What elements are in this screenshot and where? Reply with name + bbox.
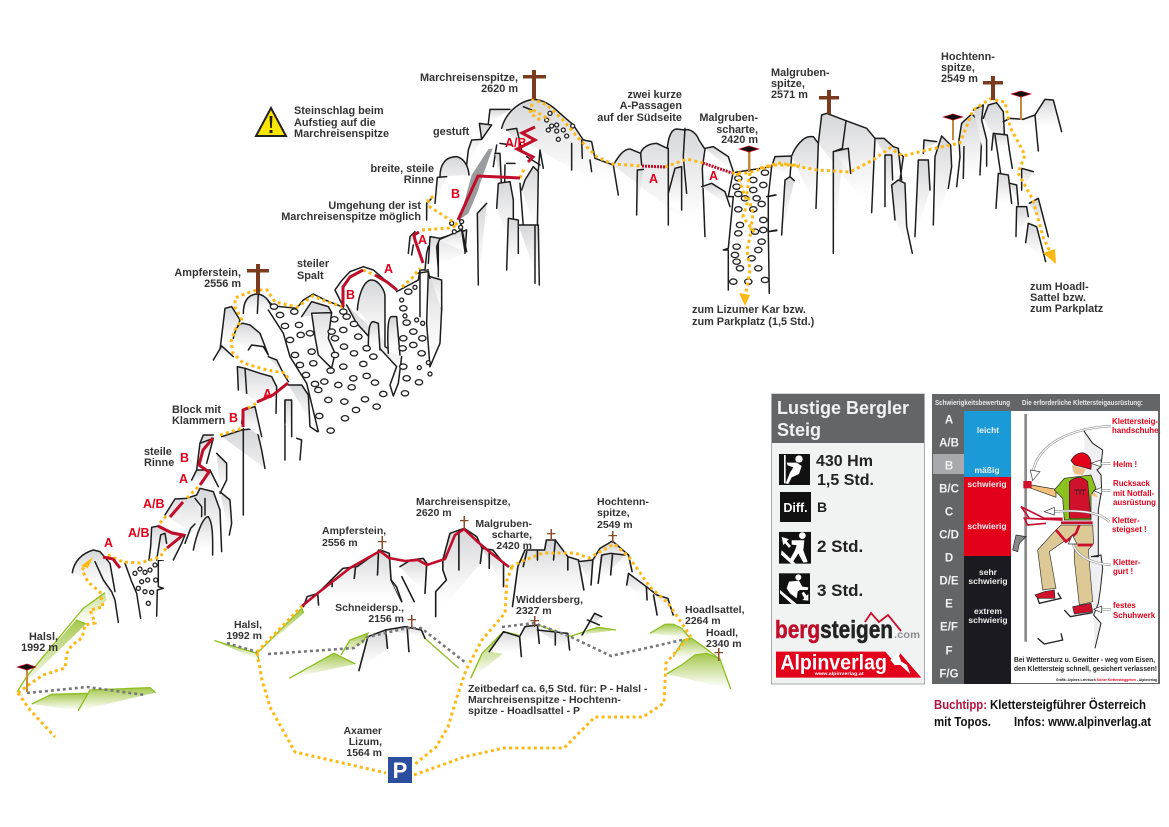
labels: main topo: steile [144, 446, 172, 458]
labels: main topo: breite, steile [370, 163, 434, 175]
icon: ascent [779, 532, 811, 564]
difficulty grades: C [945, 506, 953, 518]
overview map: labels: Zeitbedarf ca. 6,5 Std. für: P - Halsl - [468, 683, 648, 695]
difficulty grades: A/B [939, 438, 959, 450]
difficulty letters on route: A [418, 233, 427, 247]
labels: main topo: zum Hoadl- [1030, 281, 1089, 293]
equipment labels: ausrüstung [1113, 498, 1156, 507]
logo: Alpinverlag: www.alpinverlag.at [813, 671, 864, 676]
overview map: labels: scharte, [492, 529, 532, 541]
difficulty grades: B/C [939, 484, 959, 496]
difficulty letters on route: A [179, 472, 188, 486]
overview map: labels: Halsl, [234, 619, 262, 631]
difficulty letters on route: B [180, 451, 189, 465]
overview map: labels: 2549 m [597, 519, 633, 531]
rocks: Malgrubenspitze and Hochtennspitze section [767, 99, 1062, 262]
labels: main topo: Malgruben- [771, 67, 830, 79]
labels: main topo: 2620 m [481, 83, 518, 95]
overview map: labels: 2264 m [685, 615, 721, 627]
overview map: labels: 2327 m [516, 605, 552, 617]
labels: main topo: Marchreisenspitze möglich [281, 211, 421, 223]
logo: bergsteigen.com: .com [894, 629, 920, 641]
labels: main topo: Marchreisenspitze [294, 128, 389, 140]
labels: main topo [21, 51, 1104, 654]
difficulty names: sehr [979, 567, 998, 577]
book tip: Infos: www.alpinverlag.at [1014, 714, 1152, 729]
overview map: labels: 2420 m [496, 540, 532, 552]
overview map: labels: 2156 m [368, 613, 404, 625]
overview map: labels: spitze, [597, 507, 630, 519]
labels: main topo: zum Parkplatz [1030, 303, 1104, 315]
overview map: routes [227, 529, 691, 775]
equipment labels: Klettersteig- [1112, 417, 1158, 426]
labels: main topo: Sattel bzw. [1030, 292, 1086, 304]
difficulty letters on route: A/B [505, 136, 527, 150]
equipment labels: Kletter- [1112, 516, 1140, 525]
labels: main topo: Klammern [172, 415, 225, 427]
panel: route summary: 430 Hm [816, 453, 873, 470]
labels: main topo: Rinne [404, 174, 434, 186]
panel: route summary [772, 394, 924, 684]
labels: main topo: zum Lizumer Kar bzw. [692, 304, 806, 316]
difficulty names: schwierig [968, 615, 1008, 625]
logo: Alpinverlag: Alpinverlag [780, 651, 887, 674]
labels: main topo: Rinne [144, 457, 174, 469]
equipment labels: gurt ! [1113, 567, 1133, 576]
difficulty grades: F/G [939, 668, 959, 680]
overview map: labels: 2556 m [322, 537, 358, 549]
equipment labels: mit Notfall- [1113, 489, 1155, 498]
icon: warning triangle [256, 108, 286, 136]
illustration: climber with equipment [1013, 414, 1111, 648]
labels: main topo: Steinschlag beim [294, 105, 384, 117]
difficulty letters on route: A [104, 536, 113, 550]
weather warning [1014, 655, 1157, 682]
labels: main topo: 2556 m [204, 278, 241, 290]
rocks: Ampferstein section [213, 198, 467, 437]
overview map: labels: 1564 m [346, 747, 382, 759]
panel: route summary: Lustige Bergler [777, 398, 909, 418]
difficulty grades: E [945, 598, 953, 610]
difficulty names: schwierig [967, 479, 1007, 489]
scree stones [133, 111, 769, 605]
difficulty names: schwierig [967, 521, 1007, 531]
icon: difficulty [780, 492, 811, 522]
difficulty names [967, 425, 1008, 625]
labels: main topo: Spalt [297, 270, 324, 282]
overview map: rock outlines [304, 528, 673, 671]
overview map: labels: Widdersberg, [516, 594, 583, 606]
difficulty names: extrem [974, 606, 1002, 616]
panel: route summary: 3 Std. [817, 581, 863, 600]
overview map: labels: spitze - Hoadlsattel - P [468, 705, 580, 717]
labels: main topo: 2549 m [941, 73, 978, 85]
labels: main topo: spitze, [771, 78, 805, 90]
panel: route summary: 2 Std. [817, 537, 863, 556]
labels: main topo: Ampferstein, [174, 267, 241, 279]
arrowheads [81, 249, 1056, 568]
main route: red climbing sections [103, 127, 732, 568]
difficulty letters on route: A/B [128, 526, 150, 540]
difficulty names: mäßig [974, 465, 1000, 475]
overview map: labels: Ampferstein, [322, 525, 386, 537]
panel: difficulty scale and equipment: Die erforderliche Klettersteigausrüstung: [1022, 400, 1143, 407]
flags [17, 91, 1031, 692]
overview map: labels: Hoadlsattel, [685, 604, 745, 616]
icon: descent [779, 573, 810, 604]
labels: main topo: gestuft [433, 126, 470, 138]
panel: route summary: B [817, 499, 827, 515]
labels: main topo: Marchreisenspitze, [420, 72, 518, 84]
book tip: mit Topos. [934, 714, 991, 729]
book tip: Klettersteigführer Österreich [990, 697, 1146, 712]
difficulty letters on route: B [346, 288, 355, 302]
equipment labels: Rucksack [1113, 479, 1150, 488]
equipment labels: steigset ! [1112, 525, 1147, 534]
labels: main topo: steiler [297, 258, 330, 270]
panel: difficulty scale and equipment: Schwierigkeitsbewertung [935, 400, 1010, 407]
difficulty grades: B [945, 460, 953, 472]
book tip: Buchtipp: [934, 697, 987, 712]
labels: main topo: 1992 m [21, 642, 58, 654]
weather warning: Bei Wettersturz u. Gewitter - weg vom Eisen, [1014, 655, 1155, 664]
difficulty names: schwierig [968, 576, 1008, 586]
difficulty letters on route: A [709, 169, 718, 183]
difficulty letters on route: B [451, 187, 460, 201]
labels: main topo: Block mit [172, 404, 221, 416]
labels: main topo: 2571 m [771, 89, 808, 101]
labels: main topo: Hochtenn- [941, 51, 995, 63]
icon: climber [779, 454, 810, 485]
overview map: labels: 2340 m [706, 638, 742, 650]
labels: main topo: Halsl, [29, 631, 58, 643]
labels: main topo: A-Passagen [620, 100, 682, 112]
icon: parking sign [388, 757, 412, 783]
labels: main topo: zwei kurze [628, 89, 682, 101]
labels: main topo: zum Parkplatz (1,5 Std.) [692, 316, 815, 328]
rocks: Marchreisenspitze and Malgrubenscharte section [417, 99, 777, 310]
equipment labels: Helm ! [1113, 460, 1137, 469]
difficulty grades: C/D [939, 530, 959, 542]
overview map: Hoadl hills [650, 624, 731, 689]
difficulty letters on route: A [649, 172, 658, 186]
weather warning: Grafik: Alpines Lehrbuch Sicher Klettersteiggehen - Alpinverlag [1056, 678, 1157, 682]
overview map: labels: Marchreisenspitze - Hochtenn- [468, 694, 621, 706]
equipment labels: Schuhwerk [1113, 611, 1156, 620]
book tip [934, 697, 1152, 729]
icon: difficulty: Diff. [783, 501, 808, 515]
overview map: labels: 2620 m [416, 507, 452, 519]
labels: main topo: auf der Südseite [597, 112, 682, 124]
icon: parking sign: P [393, 758, 407, 783]
difficulty grades: A [945, 414, 953, 426]
overview map: labels: 1992 m [226, 630, 262, 642]
overview map: green hills [214, 608, 616, 678]
overview map: labels [226, 496, 745, 759]
equipment labels: handschuhe [1112, 426, 1159, 435]
difficulty letters on route [104, 136, 718, 550]
difficulty letters on route: A/B [143, 497, 165, 511]
logo: bergsteigen.com: bergsteigen [775, 616, 893, 644]
overview map: small crosses [378, 516, 723, 661]
difficulty letters on route: A [263, 387, 272, 401]
labels: main topo: 2420 m [721, 134, 758, 146]
equipment labels: festes [1113, 601, 1136, 610]
difficulty letters on route: B [229, 411, 238, 425]
overview map: labels: Hoadl, [706, 627, 738, 639]
overview map: labels: Axamer [343, 725, 382, 737]
difficulty letters on route: A [384, 262, 393, 276]
labels: main topo: spitze, [941, 62, 975, 74]
labels: main topo: Malgruben- [699, 112, 758, 124]
difficulty grades: D [945, 552, 953, 564]
labels: main topo: Umgehung der ist [328, 200, 421, 212]
difficulty names: leicht [977, 425, 999, 435]
logo: Alpinverlag [776, 651, 921, 678]
panel: route summary: 1,5 Std. [817, 472, 874, 489]
panel: route summary: Steig [777, 420, 821, 440]
difficulty grades [939, 414, 959, 680]
overview map: labels: Hochtenn- [597, 496, 649, 508]
grey dotted connection, main topo [27, 687, 145, 695]
equipment labels: Kletter- [1113, 558, 1141, 567]
difficulty grades: F [945, 646, 953, 658]
green slopes at Halsl, main topo [17, 593, 156, 711]
difficulty grades: D/E [939, 576, 959, 588]
rocks: lower left ridge [72, 400, 302, 622]
panel: difficulty scale and equipment [932, 394, 1160, 684]
overview map: labels: Marchreisenspitze, [416, 496, 511, 508]
labels: main topo: scharte, [716, 124, 758, 136]
overview map: labels: Lizum, [349, 736, 382, 748]
difficulty grades: E/F [940, 622, 958, 634]
overview map: labels: Schneidersp., [335, 602, 404, 614]
main route: yellow dotted sections [18, 99, 1053, 737]
overview map: labels: Malgruben- [475, 518, 532, 530]
equipment labels [1112, 417, 1159, 620]
summit crosses [247, 70, 1003, 294]
labels: main topo: Aufstieg auf die [294, 117, 376, 129]
